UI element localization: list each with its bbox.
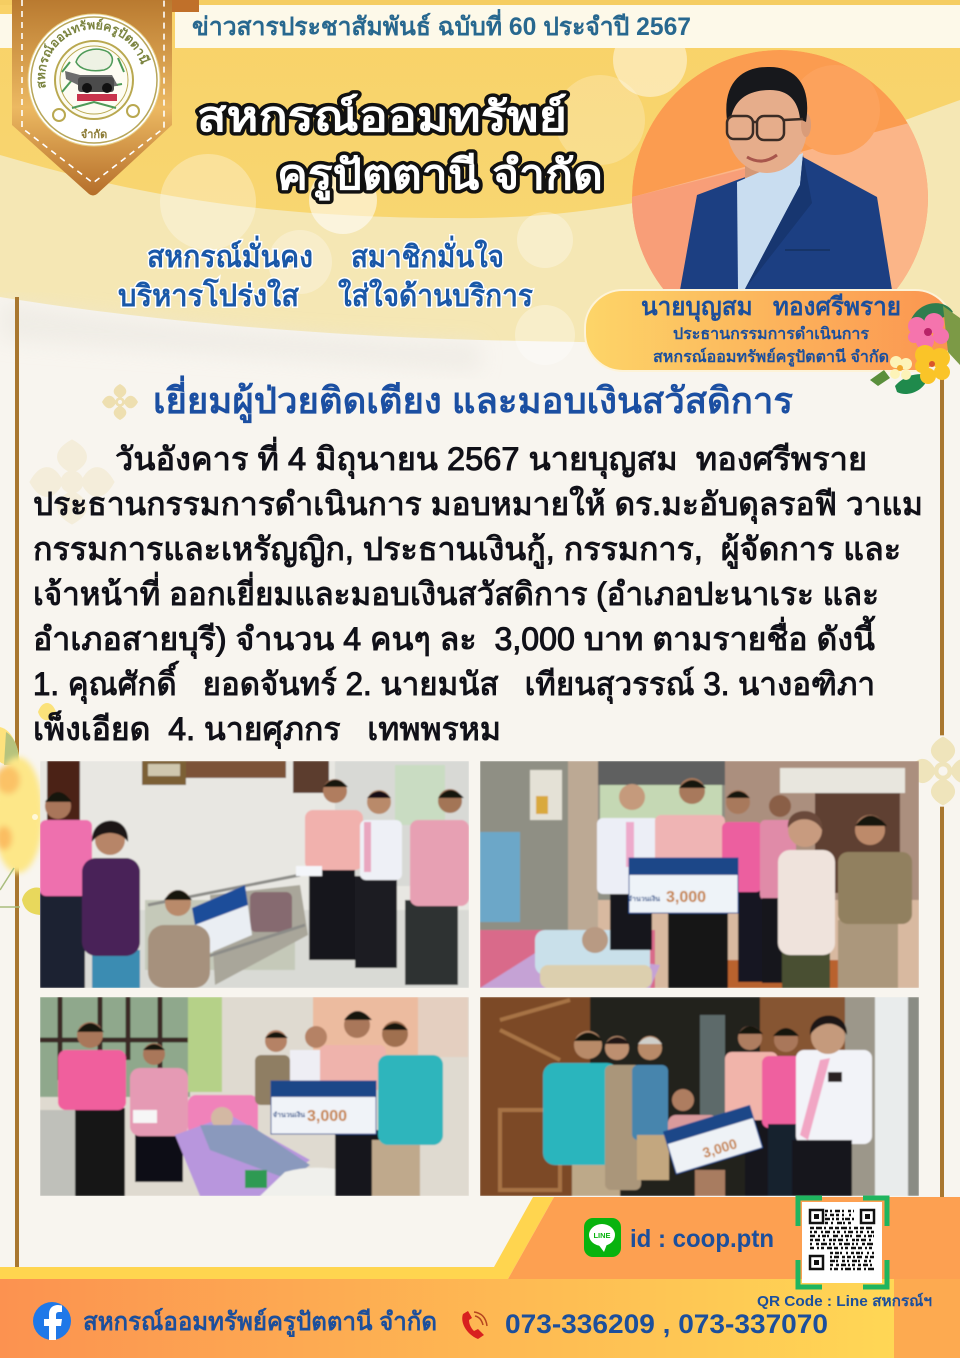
QR caption: QR Code : Line สหกรณ์ฯ	[757, 1292, 932, 1310]
co-op logo	[28, 14, 160, 146]
lapel	[745, 155, 812, 289]
co-op logo: จำกัด	[81, 128, 107, 141]
QR code	[798, 1198, 887, 1287]
seated officer	[148, 925, 210, 988]
header background with wave	[0, 0, 960, 420]
hospital bed with patient	[187, 1094, 259, 1131]
woman in floral top	[135, 1132, 183, 1182]
article body text: กรรมการและเหรัญญิก, ประธานเงินกู้, กรรมการ, ผู้จัดการ และ	[33, 531, 901, 569]
Facebook page name: สหกรณ์ออมทรัพย์ครูปัตตานี จำกัด	[83, 1307, 437, 1338]
man in light pink	[320, 1045, 386, 1090]
chairman position: ประธานกรรมการดำเนินการ	[673, 325, 869, 343]
LINE id: id : coop.ptn	[630, 1225, 774, 1253]
slogan: บริหารโปร่งใส	[118, 277, 300, 313]
elderly man	[632, 1065, 668, 1140]
phone contact	[462, 1309, 828, 1339]
shirt	[737, 153, 803, 289]
photo 2: presenting welfare cheque	[480, 761, 919, 988]
man in pink shirt	[40, 890, 85, 988]
newsletter issue text: ข่าวสารประชาสัมพันธ์ ฉบับที่ 60 ประจำปี 2567	[192, 9, 691, 41]
photo 2: presenting welfare cheque: จำนวนเงิน	[628, 895, 660, 903]
slogan: ใส่ใจด้านบริการ	[338, 278, 533, 313]
man in teal polo	[372, 1140, 420, 1196]
ribbon badge with logo	[12, 0, 199, 196]
man in floral shirt	[760, 820, 796, 900]
heading ornament	[102, 384, 138, 420]
icon: Facebook	[33, 1302, 71, 1340]
chairman portrait	[632, 50, 928, 289]
icon: LINE: LINE	[593, 1231, 611, 1240]
man in white shirt	[289, 1049, 321, 1081]
cheque sign	[271, 1081, 376, 1134]
article body text: อำเภอสายบุรี) จำนวน 4 คนๆ ละ 3,000 บาท ตามรายชื่อ ดังนี้	[33, 616, 876, 659]
photo 1: visiting bedridden patient	[40, 761, 469, 988]
face	[727, 83, 807, 173]
man in hot pink	[762, 1056, 806, 1128]
bed with patient	[145, 900, 295, 970]
man in hot pink	[738, 890, 763, 982]
man in floral shirt	[405, 900, 458, 985]
cheque sign	[663, 1106, 762, 1174]
neck	[745, 159, 802, 178]
article heading: เยี่ยมผู้ป่วยติดเตียง และมอบเงินสวัสดิการ	[153, 375, 794, 424]
officer in khaki	[605, 1065, 641, 1190]
chairman organisation: สหกรณ์ออมทรัพย์ครูปัตตานี จำกัด	[653, 347, 889, 368]
phone numbers: 073-336209 , 073-337070	[505, 1309, 828, 1339]
man in white shirt and pink tie	[796, 1050, 872, 1144]
article body text: วันอังคาร ที่ 4 มิถุนายน 2567 นายบุญสม ทองศรีพราย	[115, 437, 867, 479]
man in teal polo	[572, 1160, 620, 1196]
cheque sign	[196, 904, 253, 954]
photo 3: visiting patient on pink bed	[40, 997, 469, 1196]
slogan: สมาชิกมั่นใจ	[351, 235, 504, 274]
chairman name: นายบุญสม ทองศรีพราย	[641, 293, 901, 323]
icon: phone	[462, 1311, 487, 1339]
article body text	[33, 437, 923, 749]
side rules	[15, 297, 944, 1267]
seated patient	[666, 1114, 714, 1131]
photo 3: visiting patient on pink bed: 3,000	[307, 1108, 347, 1125]
icon: LINE	[584, 1218, 621, 1257]
LINE contact	[584, 1218, 774, 1257]
article body text: ประธานกรรมการดำเนินการ มอบหมายให้ ดร.มะอับดุลรอฟี วาแม	[33, 486, 923, 524]
photo 2: presenting welfare cheque: 3,000	[666, 889, 706, 906]
bedridden patient	[480, 930, 655, 988]
cheque sign	[629, 858, 738, 913]
slogan	[118, 235, 533, 313]
man in light pink	[725, 1052, 778, 1124]
article body text: เพ็งเอียด 4. นายศุภกร เทพพรหม	[33, 710, 501, 749]
co-op logo: สหกรณ์ออมทรัพย์ครูปัตตานี	[37, 18, 151, 88]
photo 4: group with seated patient	[480, 997, 919, 1196]
footer shapes	[0, 1197, 960, 1358]
Facebook contact	[33, 1302, 437, 1340]
title	[197, 93, 603, 201]
article body text: 1. คุณศักดิ์ ยอดจันทร์ 2. นายมนัส เทียนสุวรรณ์ 3. นางอฑิภา	[33, 661, 875, 704]
suit	[680, 157, 892, 290]
slogan: สหกรณ์มั่นคง	[147, 235, 313, 274]
man in light pink	[667, 912, 729, 988]
article body text: เจ้าหน้าที่ ออกเยี่ยมและมอบเงินสวัสดิการ (อำเภอปะนาเระ และ	[33, 572, 879, 612]
right margin ornament	[908, 735, 960, 807]
faint ornament behind body text	[29, 439, 115, 525]
woman in floral top	[782, 950, 830, 988]
woman in floral purple	[92, 950, 140, 988]
header strip	[0, 0, 960, 48]
man in white shirt	[610, 890, 652, 950]
cheque sign: 3,000	[701, 1135, 739, 1161]
glasses	[727, 116, 803, 140]
title: สหกรณ์ออมทรัพย์	[197, 93, 567, 140]
title: ครูปัตตานี จำกัด	[277, 151, 603, 201]
man in light pink with envelope	[309, 868, 355, 960]
hair	[726, 67, 807, 122]
name plate	[585, 290, 953, 371]
man in pink shirt	[75, 1108, 125, 1196]
decorative yellow flower at left margin	[0, 703, 56, 915]
photo 3: visiting patient on pink bed: จำนวนเงิน	[273, 1111, 305, 1119]
man in white shirt	[355, 876, 397, 968]
tropical flowers	[870, 303, 960, 394]
officer in khaki	[255, 1055, 290, 1105]
officer in khaki uniform	[838, 920, 898, 988]
